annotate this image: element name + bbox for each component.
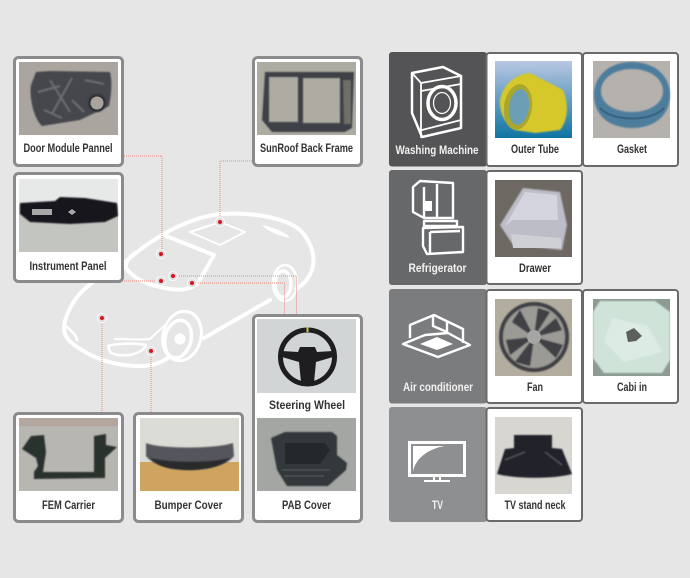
card: Instrument Panel: Instrument Panel <box>30 261 106 273</box>
card: Outer Tube: Outer Tube <box>511 144 559 156</box>
panel: Washing Machine: Washing Machine <box>396 145 478 157</box>
card: Instrument Panel <box>14 174 122 282</box>
card: Gasket: Gasket <box>617 144 647 156</box>
card: Drawer <box>486 171 582 284</box>
panel: Air conditioner: Air conditioner <box>403 382 473 394</box>
panel: Refrigerator: Refrigerator <box>408 263 467 275</box>
card: SunRoof Back Frame <box>254 58 362 166</box>
card: Cabi in <box>583 290 678 403</box>
card: Fan: Fan <box>527 382 543 394</box>
card: Bumper Cover <box>134 414 242 522</box>
card: Fan <box>486 290 582 403</box>
location markers <box>98 218 224 356</box>
panel: TV <box>389 407 487 522</box>
card: FEM Carrier: FEM Carrier <box>42 500 95 512</box>
connector lines <box>102 156 296 412</box>
card: Outer Tube <box>486 53 582 166</box>
card: TV stand neck: TV stand neck <box>504 500 566 512</box>
icon: air conditioner <box>403 315 470 357</box>
card: Drawer: Drawer <box>519 263 551 275</box>
card: FEM Carrier <box>14 414 122 522</box>
panel: Washing Machine <box>389 52 487 166</box>
icon: washing machine <box>412 67 461 137</box>
card: Door Module Pannel: Door Module Pannel <box>24 143 112 155</box>
panel: Air conditioner <box>389 289 487 404</box>
panel: Refrigerator <box>389 170 487 285</box>
icon: refrigerator <box>413 181 463 254</box>
panel: TV: TV <box>432 500 443 512</box>
photo: steering wheel <box>257 319 356 393</box>
card: Cabi in: Cabi in <box>617 382 647 394</box>
card: Steering Wheel and PAB Cover: PAB Cover <box>282 500 331 512</box>
card: Gasket <box>583 53 678 166</box>
card: TV stand neck <box>486 408 582 521</box>
card: Bumper Cover: Bumper Cover <box>154 500 223 512</box>
card: Steering Wheel and PAB Cover: Steering Wheel <box>269 400 345 412</box>
photo: PAB cover <box>257 418 356 491</box>
card: Door Module Pannel <box>14 58 122 166</box>
car outline illustration <box>64 214 313 366</box>
icon: TV <box>410 442 464 481</box>
card: Steering Wheel and PAB Cover <box>254 316 362 522</box>
card: SunRoof Back Frame: SunRoof Back Frame <box>260 143 353 155</box>
